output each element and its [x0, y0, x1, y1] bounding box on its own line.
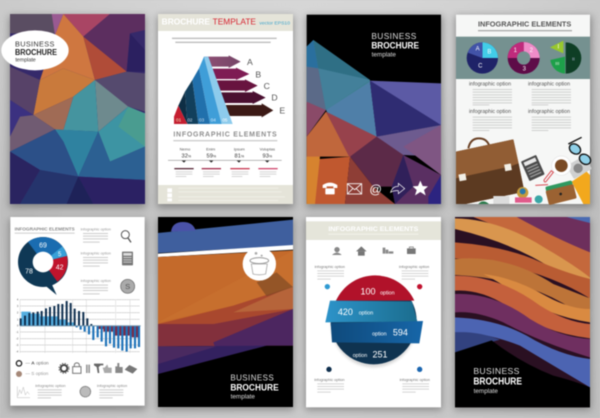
pie chart: I II III: II — [572, 57, 575, 63]
heading: INFOGRAPHIC ELEMENTS — [478, 21, 572, 28]
panel: polygon brochure cover — [1, 14, 145, 204]
pyramid arrows chart: B — [255, 69, 261, 79]
icon: glasses — [567, 137, 593, 167]
header band — [306, 221, 441, 240]
icon: star — [413, 181, 428, 195]
percent timeline: Voluptas — [260, 146, 275, 151]
heading: INFOGRAPHIC ELEMENTS — [15, 227, 75, 233]
right option text blocks: infographic option — [81, 251, 111, 255]
pie chart: A B C: A — [476, 47, 480, 53]
option text blocks: infographic option — [315, 265, 345, 269]
cover title: BROCHURE — [230, 383, 279, 393]
percent timeline: Nemo — [180, 146, 191, 151]
segmented circle chart: option — [359, 310, 373, 316]
icon row — [59, 363, 137, 374]
donut chart: 1 2 3: 1 — [514, 48, 518, 54]
desk clutter — [478, 187, 543, 204]
icon: at sign: @ — [369, 182, 382, 196]
legend — [16, 360, 49, 377]
teal band — [456, 37, 590, 79]
panel: infographic with pie charts and briefcase — [456, 15, 593, 205]
pie chart: A B C: C — [478, 64, 483, 70]
bar chart: 2 — [17, 311, 19, 315]
segmented circle chart: 420 — [338, 307, 353, 317]
option text blocks: infographic option — [314, 378, 345, 382]
option text blocks: infographic option — [469, 109, 511, 115]
icon: buildings — [383, 248, 393, 254]
cover title — [473, 366, 522, 395]
pyramid arrows chart: A — [247, 57, 253, 67]
donut speech bubble chart: 78 — [25, 269, 33, 276]
bar chart: 4 — [17, 298, 19, 302]
pie chart: I II III — [550, 41, 581, 74]
donut speech bubble chart: 69 — [39, 242, 47, 249]
option text blocks — [469, 82, 571, 131]
cover title: template — [231, 393, 255, 400]
option text blocks: infographic option — [399, 265, 429, 269]
panel: circular ribbon infographic — [306, 217, 441, 407]
pyramid arrows chart — [174, 55, 285, 124]
donut chart: 1 2 3: 2 — [530, 48, 534, 54]
footer band — [158, 185, 293, 204]
percent timeline — [168, 146, 282, 163]
percent timeline: 81% — [235, 154, 245, 160]
icon: paper clip and key — [535, 171, 553, 185]
panel: donut, bar chart infographic — [10, 217, 145, 406]
pyramid arrows chart: 02 — [187, 117, 193, 122]
panel: pyramid infographic — [158, 14, 293, 204]
pie chart: A B C — [467, 42, 498, 74]
donut speech bubble chart: 42 — [56, 264, 64, 271]
pyramid arrows chart: D — [271, 93, 278, 103]
segmented circle chart: 594 — [393, 327, 408, 337]
header band — [158, 14, 293, 31]
legend: — A option — [25, 360, 49, 365]
percent timeline: Ipsum — [234, 146, 245, 151]
pie chart: I II III: I — [557, 45, 559, 51]
header band: BROCHURE — [162, 16, 210, 26]
pyramid arrows chart: 01 — [176, 117, 182, 122]
bar chart: 3 — [17, 304, 19, 308]
cover title — [371, 31, 419, 59]
panel: orange wave brochure cover — [158, 217, 293, 407]
header band: TEMPLATE — [213, 17, 256, 27]
icon: magnifier — [121, 231, 131, 242]
pyramid arrows chart: C — [264, 81, 270, 91]
segmented circle chart: option — [380, 290, 395, 296]
bar chart — [16, 298, 141, 354]
bar chart: -3 — [16, 343, 19, 347]
pyramid arrows chart: 04 — [211, 117, 216, 122]
icon: dollar coin: S — [125, 282, 130, 291]
icon: house — [356, 246, 367, 256]
cover title badge — [1, 30, 69, 70]
cover title: BROCHURE — [473, 377, 522, 388]
bottom option blocks: infographic option — [35, 384, 66, 388]
donut speech bubble chart — [18, 237, 68, 295]
donut chart: 1 2 3 — [508, 42, 540, 74]
legend: — S option — [25, 371, 49, 376]
right option text blocks: infographic option — [81, 279, 111, 283]
pie chart: I II III: III — [555, 61, 559, 67]
icon: briefcase — [456, 138, 523, 204]
option text blocks: infographic option — [528, 109, 570, 115]
bar chart: 1 — [17, 317, 19, 321]
cover title: template — [474, 388, 498, 395]
segmented circle chart: 251 — [372, 349, 387, 359]
icon: magic hat badge — [243, 247, 276, 281]
cover title badge: BUSINESS — [15, 40, 55, 49]
segmented circle chart: option — [353, 353, 367, 359]
icon: person — [332, 247, 342, 255]
percent timeline: 32% — [182, 154, 192, 160]
icon: envelope — [347, 184, 362, 194]
pyramid arrows chart: 03 — [199, 117, 205, 122]
bar chart: -2 — [16, 337, 19, 341]
cover title badge: template — [15, 58, 36, 64]
icon: forward arrow — [391, 183, 405, 194]
donut speech bubble chart: 5 — [58, 252, 62, 258]
option text blocks: infographic option — [469, 82, 511, 88]
pie chart: A B C: B — [487, 50, 491, 56]
icon: coffee cup — [552, 156, 571, 175]
icon: camera — [566, 156, 592, 179]
icon: briefcase — [407, 247, 416, 254]
icon: folder — [572, 172, 590, 204]
right option text blocks: infographic option — [81, 227, 111, 231]
bottom option blocks: infographic option — [97, 384, 127, 388]
four option columns — [174, 168, 278, 177]
bar chart: -4 — [16, 350, 19, 354]
segmented circle chart: 100 — [360, 287, 375, 297]
bar chart: -1 — [16, 330, 19, 334]
cover title — [230, 373, 279, 400]
marker dots — [325, 284, 422, 372]
cover title badge: BROCHURE — [15, 48, 58, 57]
icon: calculator — [122, 252, 133, 265]
segmented circle chart — [325, 275, 423, 367]
donut chart: 1 2 3: 3 — [523, 67, 527, 73]
percent timeline: 59% — [207, 154, 217, 160]
icon: wallet — [544, 180, 577, 205]
panel: black polygon brochure cover — [307, 15, 441, 204]
cover title: BUSINESS — [230, 373, 274, 382]
header band: INFOGRAPHIC ELEMENTS — [328, 226, 419, 233]
segmented circle chart: option — [372, 332, 387, 338]
icon: dollar coin — [121, 279, 135, 293]
cover title: BROCHURE — [371, 41, 419, 51]
percent timeline: 93% — [263, 154, 273, 160]
pyramid arrows chart: 05 — [222, 117, 228, 122]
option text blocks: infographic option — [528, 82, 570, 88]
icon: calculator — [521, 155, 545, 181]
bar chart: 0 — [17, 324, 19, 328]
right option text blocks — [81, 227, 111, 294]
cover title: BUSINESS — [473, 366, 520, 376]
panel: ribbon wave brochure cover — [455, 217, 590, 407]
option text blocks: infographic option — [400, 378, 430, 382]
section heading: INFOGRAPHIC ELEMENTS — [173, 132, 277, 139]
cover title: template — [372, 52, 396, 59]
pyramid arrows chart: E — [279, 106, 285, 116]
percent timeline: Enim — [206, 146, 216, 151]
option text blocks — [314, 265, 430, 393]
header band: vector EPS10 — [259, 20, 290, 26]
icon: telephone — [323, 183, 337, 194]
bottom option blocks — [17, 384, 127, 398]
cover title: BUSINESS — [371, 31, 417, 41]
